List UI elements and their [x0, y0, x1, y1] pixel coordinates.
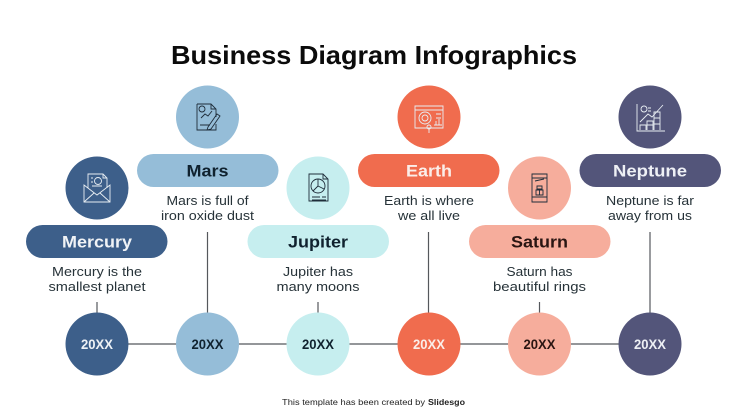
- icon: financial document with pencil: [176, 86, 239, 148]
- Mars name pill: Mars: [186, 162, 228, 180]
- Saturn description: beautiful rings: [493, 279, 587, 294]
- Mars description: [161, 193, 254, 223]
- timeline connectors: [97, 232, 650, 344]
- Neptune description: away from us: [608, 208, 693, 223]
- panel: Jupiter: [248, 156, 389, 376]
- Saturn name pill: [469, 225, 610, 258]
- icon: smartphone with chart: [508, 156, 571, 220]
- panel: Saturn: [469, 156, 610, 376]
- footer credit: Slidesgo: [428, 397, 465, 407]
- Earth description: [384, 193, 474, 223]
- Neptune name pill: [580, 154, 721, 187]
- Jupiter year node: 20XX: [302, 337, 334, 352]
- Earth name pill: Earth: [406, 162, 452, 180]
- icon: presentation board: [398, 86, 460, 148]
- Neptune year node: [618, 312, 682, 376]
- Mercury year node: [66, 312, 128, 376]
- Mars year node: 20XX: [192, 337, 224, 352]
- Jupiter name pill: Jupiter: [288, 232, 348, 252]
- Saturn description: [493, 264, 587, 294]
- Jupiter description: many moons: [276, 279, 360, 294]
- panel: Neptune: [580, 86, 721, 376]
- panel: Mercury: [26, 156, 168, 376]
- Mercury year node: 20XX: [81, 337, 113, 352]
- Saturn year node: 20XX: [524, 337, 556, 352]
- Mercury name pill: Mercury: [62, 232, 133, 252]
- Mercury description: smallest planet: [48, 279, 146, 294]
- Mercury name pill: [26, 225, 168, 258]
- Jupiter year node: [286, 312, 350, 376]
- Jupiter description: Jupiter has: [283, 264, 354, 279]
- Saturn description: Saturn has: [506, 264, 573, 279]
- Neptune year node: 20XX: [634, 337, 666, 352]
- Mercury description: Mercury is the: [52, 264, 142, 279]
- panel: Mars: [137, 86, 278, 376]
- Earth name pill: [358, 154, 500, 187]
- icon: pie chart document: [286, 156, 350, 220]
- Jupiter name pill: [248, 225, 389, 258]
- Jupiter description: [276, 264, 360, 294]
- Mars name pill: [137, 154, 278, 187]
- Neptune description: Neptune is far: [606, 193, 695, 208]
- Mercury description: [48, 264, 146, 294]
- Earth description: Earth is where: [384, 193, 474, 208]
- Mars description: Mars is full of: [166, 193, 249, 208]
- Mars description: iron oxide dust: [161, 208, 254, 223]
- Saturn name pill: Saturn: [511, 232, 568, 252]
- icon: envelope with document: [66, 156, 128, 220]
- Saturn year node: [508, 312, 571, 376]
- Mars year node: [176, 312, 239, 376]
- Earth description: we all live: [397, 208, 460, 223]
- Earth year node: 20XX: [413, 337, 445, 352]
- title: Business Diagram Infographics: [171, 40, 577, 70]
- Neptune description: [606, 193, 695, 223]
- panel: Earth: [358, 86, 500, 376]
- footer credit: This template has been created by: [282, 397, 426, 407]
- icon: growth chart with coins: [618, 86, 682, 148]
- Neptune name pill: Neptune: [613, 162, 687, 180]
- Earth year node: [398, 312, 460, 376]
